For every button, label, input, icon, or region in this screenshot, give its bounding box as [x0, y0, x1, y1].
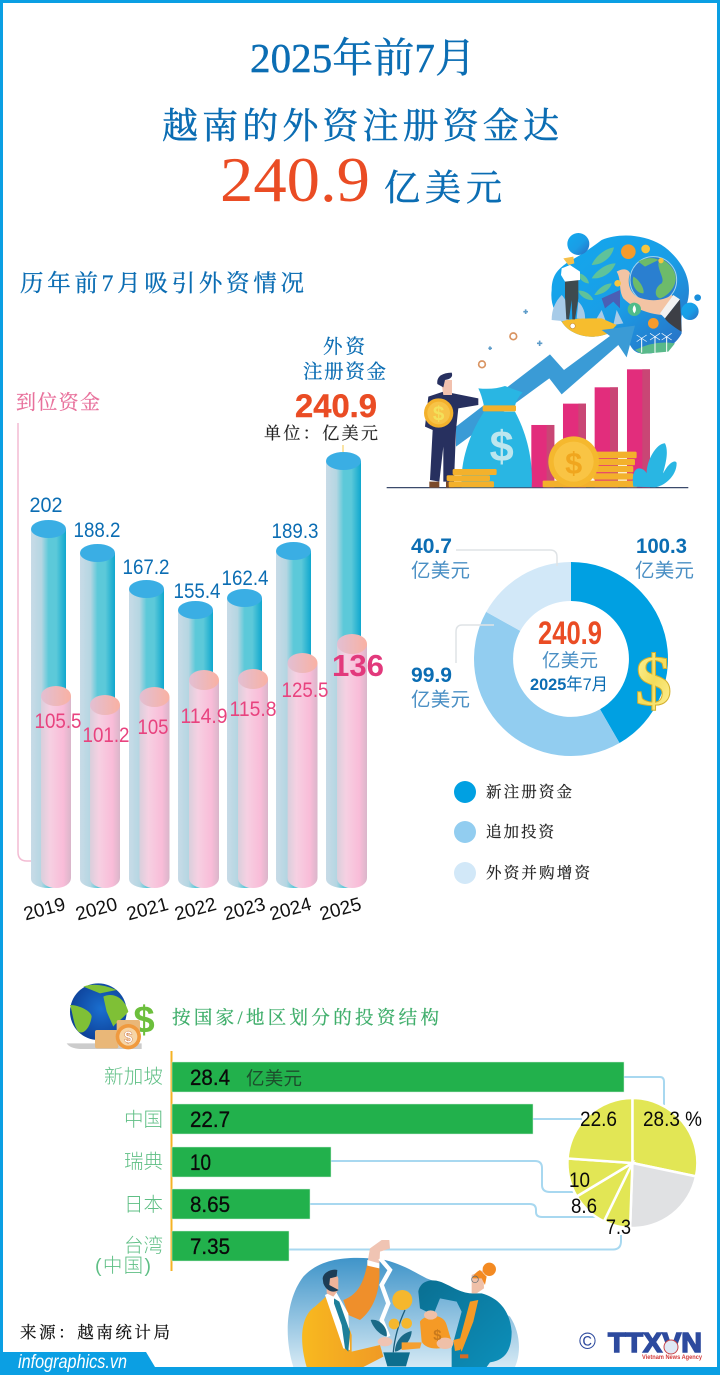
- disbursed values: 101.2: [82, 724, 130, 747]
- person with coin: [424, 373, 478, 488]
- cylinders: disbursed capital: [41, 634, 367, 888]
- money plant: [371, 1290, 412, 1366]
- country labels: 新加坡: [104, 1066, 163, 1088]
- icon: globe with coins: [67, 983, 155, 1049]
- year labels: 2022: [172, 894, 219, 925]
- country labels: 日本: [124, 1194, 163, 1216]
- bar values: [190, 1065, 302, 1259]
- unit labels: [411, 560, 694, 711]
- background blob: [288, 1258, 519, 1367]
- bar values: 8.65: [190, 1192, 230, 1217]
- cylinder chart: [21, 445, 384, 925]
- person with coin: $: [433, 403, 445, 426]
- bottom illustration: investors: [288, 1240, 519, 1367]
- total registered value: 240.9: [295, 388, 377, 424]
- segment: M&A: [486, 562, 571, 631]
- bar values: 28.4: [190, 1065, 230, 1090]
- year labels: 2021: [124, 894, 171, 925]
- money bag: $: [490, 424, 514, 472]
- legend: 外资并购增资: [486, 864, 590, 882]
- disbursed values: 114.9: [180, 705, 228, 728]
- woman: [402, 1263, 512, 1367]
- value labels: 40.7: [411, 535, 452, 558]
- title: 亿美元: [384, 168, 502, 208]
- series label: registered capital: 注册资金: [303, 361, 386, 383]
- bottom frame bar: [0, 1367, 720, 1375]
- disbursed values: 125.5: [282, 679, 328, 702]
- series label: registered capital: 外资: [323, 336, 365, 358]
- year labels: 2025: [317, 894, 364, 925]
- pink chart bars: [531, 369, 650, 487]
- title: 越南的外资注册资金达: [162, 106, 559, 146]
- donut chart: [411, 535, 694, 756]
- series label: disbursed capital: 到位资金: [16, 391, 100, 414]
- year labels: 2024: [267, 894, 314, 925]
- bar values: 亿美元: [246, 1068, 302, 1089]
- disbursed values: 105: [138, 716, 168, 739]
- illustration: concept bubble with globe: [551, 233, 701, 354]
- title: [162, 35, 559, 215]
- heading: by country: 按国家/地区划分的投资结构: [172, 1007, 439, 1029]
- man: [302, 1240, 392, 1367]
- title: 240.9: [220, 144, 370, 215]
- woman: $: [433, 1328, 441, 1344]
- pie labels: 22.6: [580, 1108, 617, 1131]
- series label: disbursed capital: [16, 391, 100, 861]
- logo: TTXVN: Vietnam News Agency: [642, 1355, 703, 1361]
- legend: 新注册资金: [486, 783, 572, 801]
- disbursed values: 115.8: [230, 698, 276, 721]
- value labels: 99.9: [411, 664, 452, 687]
- coins: [447, 436, 637, 487]
- registered values: 189.3: [272, 520, 318, 543]
- unit labels: 亿美元: [635, 560, 694, 582]
- country labels: 瑞典: [124, 1151, 163, 1173]
- bars: [172, 1062, 624, 1261]
- registered values: 162.4: [222, 567, 269, 590]
- pie labels: 7.3: [606, 1216, 631, 1239]
- icon: gold dollar: $: [635, 641, 672, 721]
- ground line: [387, 486, 688, 490]
- series label: registered capital: [303, 336, 386, 383]
- logo: TTXVN: TTXVN: [608, 1327, 702, 1358]
- logo: TTXVN: [579, 1327, 703, 1361]
- title: 2025年前7月: [250, 35, 476, 81]
- country labels: [95, 1066, 163, 1277]
- bar values: 7.35: [190, 1234, 230, 1259]
- connectors to pie: [289, 1077, 664, 1250]
- logo: TTXVN: ©: [579, 1328, 596, 1354]
- bar chart: by country: [95, 1051, 664, 1277]
- registered values: 167.2: [122, 556, 170, 579]
- unit note: 单位：亿美元: [264, 424, 378, 443]
- country labels: 中国: [124, 1109, 163, 1131]
- center label: [530, 615, 608, 694]
- segment: new registered: [571, 562, 668, 743]
- heading: yearly FDI: 历年前7月吸引外资情况: [20, 270, 304, 297]
- bar values: 10: [190, 1150, 211, 1175]
- segment: additional investment: [474, 612, 620, 756]
- icon: globe with coins: $: [133, 998, 155, 1041]
- icon: globe with coins: $: [124, 1029, 133, 1046]
- center label: 240.9: [538, 615, 602, 651]
- year labels: 2023: [221, 894, 268, 925]
- unit labels: 亿美元: [411, 560, 470, 582]
- axis: [170, 1051, 172, 1271]
- year labels: 2019: [21, 894, 68, 925]
- pie labels: 10: [569, 1169, 590, 1192]
- legend: 追加投资: [486, 823, 554, 841]
- value labels: [411, 535, 687, 687]
- unit labels: 亿美元: [411, 689, 470, 711]
- country labels: (中国): [95, 1255, 151, 1277]
- pie chart: share by country: [567, 1098, 702, 1239]
- disbursed values: 136: [332, 648, 384, 683]
- pie labels: 28.3 %: [643, 1108, 702, 1131]
- cylinders: registered capital: [31, 452, 361, 888]
- legend: [454, 781, 590, 884]
- source note: 来源：越南统计局: [20, 1323, 170, 1342]
- value labels: 100.3: [636, 535, 687, 558]
- year labels: 2020: [73, 894, 120, 925]
- pie labels: [569, 1108, 702, 1239]
- registered values: 188.2: [74, 519, 120, 542]
- disbursed values: 105.5: [34, 710, 82, 733]
- rising arrow: [456, 326, 635, 447]
- money bag: [461, 386, 532, 487]
- footer tab: website: infographics.vn: [18, 1352, 127, 1373]
- registered values: 202: [30, 494, 62, 517]
- center label: 2025年7月: [530, 675, 608, 694]
- leader lines: [456, 550, 557, 663]
- disbursed values: [34, 648, 384, 747]
- leaf: [633, 443, 677, 487]
- year labels: [21, 894, 364, 925]
- bar values: 22.7: [190, 1107, 230, 1132]
- sparkle dots: [479, 309, 542, 368]
- registered values: 155.4: [174, 580, 221, 603]
- pie labels: 8.6: [571, 1195, 597, 1218]
- registered values: [30, 494, 318, 603]
- center label: 亿美元: [542, 650, 598, 671]
- coins: $: [565, 446, 582, 480]
- illustration: growth chart and investor: [387, 309, 688, 488]
- country labels: 台湾: [124, 1235, 163, 1257]
